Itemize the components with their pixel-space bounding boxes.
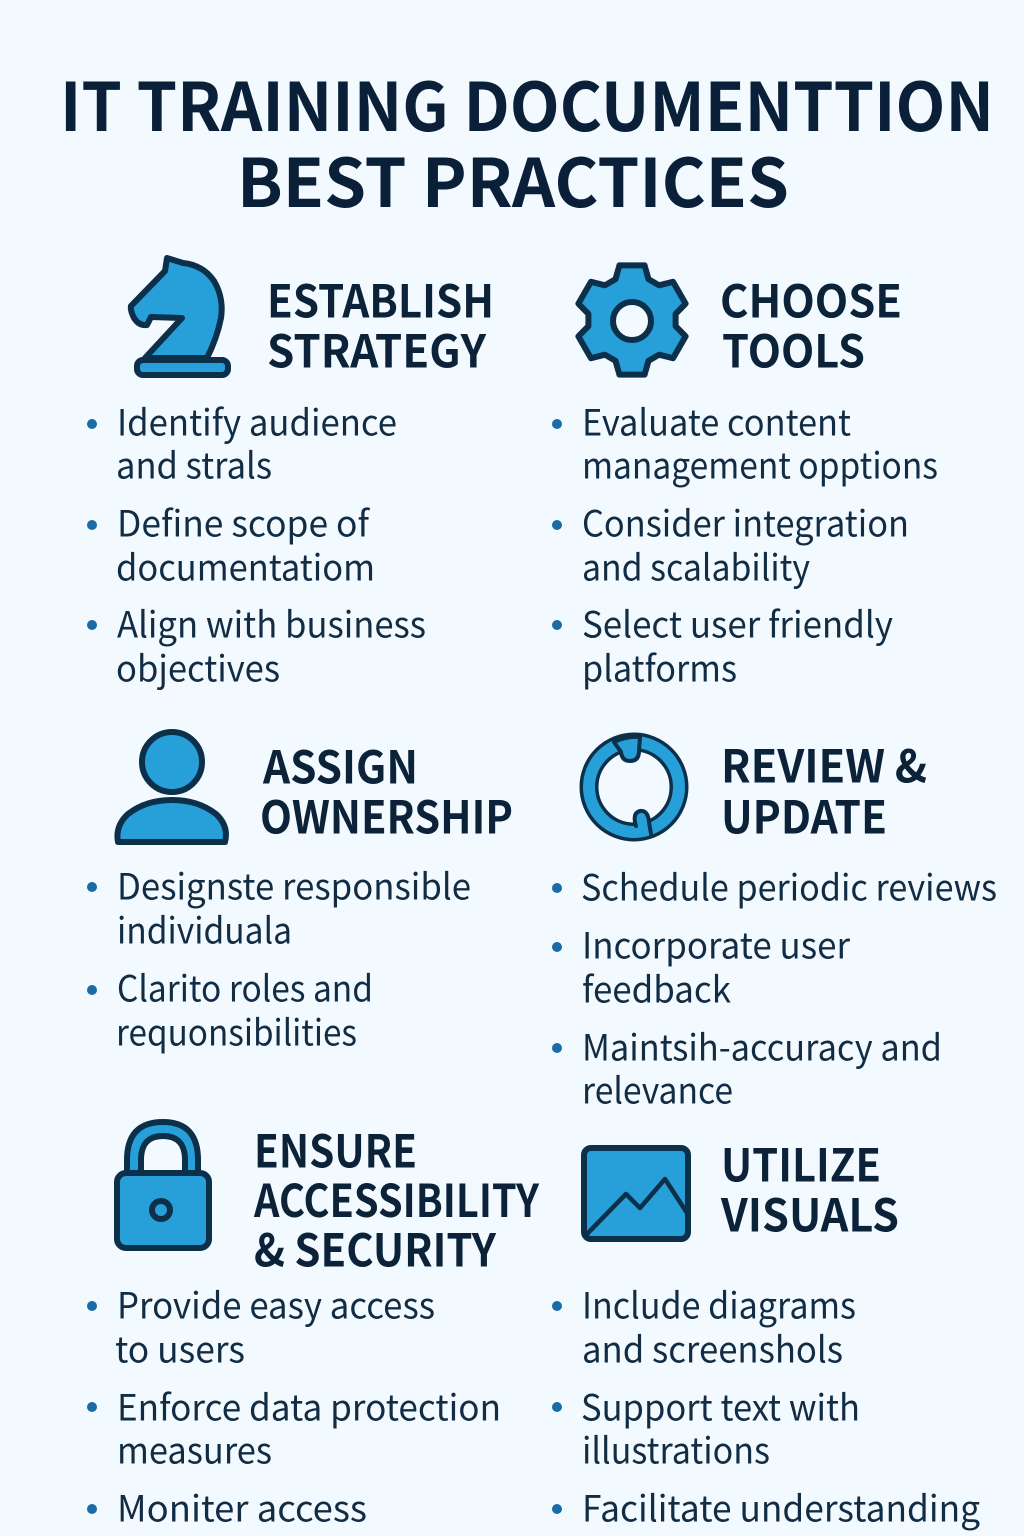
icon: picture	[584, 1148, 689, 1239]
bullet list: Moniter access	[117, 1480, 367, 1532]
panel: establish strategy	[87, 258, 494, 692]
bullet list: Define scope of	[117, 496, 370, 548]
panel: ensure accessibility and security	[87, 1116, 540, 1532]
heading: CHOOSE	[720, 266, 902, 330]
bullet list: individuala	[117, 902, 292, 954]
heading: UPDATE	[721, 782, 887, 846]
heading: TOOLS	[722, 316, 865, 380]
bullet list: documentatiom	[116, 540, 375, 592]
bullet list: Maintsih-accuracy and	[582, 1020, 942, 1072]
icon: gear	[578, 265, 686, 375]
bullet list: Include diagrams	[582, 1278, 856, 1330]
bullet list: Consider integration	[582, 496, 909, 548]
bullet list	[87, 1278, 501, 1532]
bullet list: management opptions	[582, 438, 938, 490]
bullet list	[552, 394, 938, 692]
panel: utilize visuals	[552, 1130, 980, 1532]
heading: REVIEW &	[721, 730, 927, 796]
bullet list: relevance	[582, 1062, 733, 1114]
bullet list: Designste responsible	[117, 858, 471, 910]
bullet list: objectives	[116, 640, 280, 692]
bullet list: and scalability	[582, 540, 810, 592]
bullet list	[552, 1278, 980, 1532]
bullet list: Provide easy access	[117, 1278, 435, 1330]
bullet list: Enforce data protection	[117, 1380, 501, 1432]
bullet list: platforms	[582, 640, 737, 692]
heading	[260, 732, 513, 846]
heading: ASSIGN	[262, 732, 418, 796]
bullet list: and screenshols	[582, 1322, 843, 1374]
heading	[720, 1130, 899, 1244]
title: BEST PRACTICES	[237, 130, 789, 227]
heading: STRATEGY	[267, 316, 487, 380]
bullet list: feedback	[582, 962, 731, 1014]
heading: UTILIZE	[721, 1130, 881, 1194]
heading	[720, 266, 902, 380]
bullet list: Incorporate user	[582, 918, 851, 970]
heading	[721, 730, 927, 846]
icon: chess knight	[131, 258, 228, 375]
bullet list: measures	[117, 1422, 272, 1474]
heading: & SECURITY	[254, 1214, 497, 1280]
bullet list: and strals	[116, 438, 272, 490]
heading	[267, 266, 494, 380]
title	[60, 54, 994, 227]
bullet list: Identify audience	[117, 394, 397, 446]
bullet list: Evaluate content	[582, 394, 851, 446]
bullet list: Select user friendly	[582, 596, 893, 648]
bullet list	[552, 860, 997, 1114]
heading: ACCESSIBILITY	[253, 1165, 540, 1230]
icon: person	[117, 732, 226, 842]
heading	[253, 1116, 540, 1280]
bullet list: Schedule periodic reviews	[581, 860, 997, 912]
bullet list: Align with business	[117, 596, 426, 648]
bullet list: to users	[115, 1322, 245, 1374]
bullet list	[87, 394, 426, 692]
bullet list: Support text with	[581, 1380, 860, 1432]
panel: assign ownership	[87, 732, 513, 1056]
heading: OWNERSHIP	[260, 782, 513, 846]
heading: ENSURE	[254, 1116, 417, 1180]
bullet list: Facilitate understanding	[582, 1480, 980, 1532]
heading: VISUALS	[720, 1180, 899, 1244]
bullet list: requonsibilities	[116, 1004, 357, 1056]
bullet list: illustrations	[582, 1422, 770, 1474]
panel: review and update	[552, 730, 997, 1114]
icon: refresh cycle	[589, 737, 679, 834]
panel: choose tools	[552, 265, 938, 692]
heading: ESTABLISH	[267, 266, 494, 330]
bullet list: Clarito roles and	[117, 960, 373, 1012]
icon: padlock	[117, 1122, 209, 1248]
title: IT TRAINING DOCUMENTTION	[60, 54, 994, 151]
bullet list	[87, 858, 471, 1056]
